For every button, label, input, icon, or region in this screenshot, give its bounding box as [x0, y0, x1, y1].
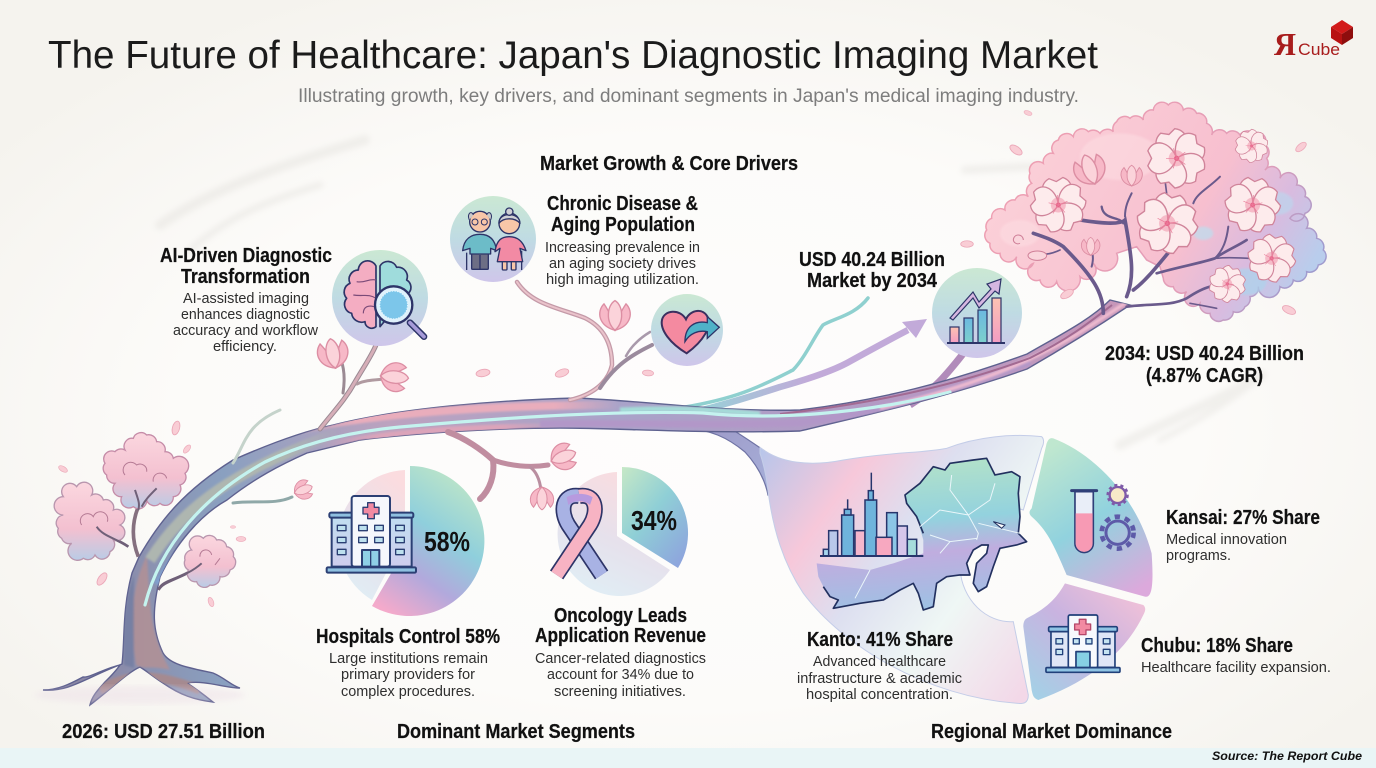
small tree branches and blossoms: [54, 433, 236, 590]
trunk shading: [133, 555, 170, 670]
icon: heart with arrow circle: [651, 294, 723, 366]
icon: growth chart circle: [932, 268, 1022, 358]
text block: oncology: Oncology Leads: [554, 604, 687, 627]
icon: city skyline: [820, 473, 923, 556]
segment: Chubu: [1023, 583, 1145, 700]
text block: Kansai: Kansai: 27% Share: [1166, 506, 1320, 529]
root shadow: [35, 686, 245, 704]
text block: chronic disease: high imaging utilization.: [546, 271, 699, 288]
caption: 2026: 2026: USD 27.51 Billion: [62, 720, 265, 743]
footer band: [0, 748, 1376, 768]
text block: AI-driven: AI-Driven Diagnostic: [160, 244, 332, 267]
icon: hospital: [327, 496, 416, 573]
text block: oncology: Application Revenue: [535, 624, 706, 647]
panel: regional donut: [760, 435, 1153, 703]
branch: lavender growth arrow: [670, 319, 927, 418]
title: The Future of Healthcare: Japan's Diagnostic Imaging Market: [48, 34, 1098, 77]
text block: Kanto: infrastructure & academic: [797, 670, 962, 687]
text block: Kanto: [797, 628, 962, 703]
icon: hospital: [1046, 615, 1120, 672]
text block: chronic disease: Chronic Disease &: [547, 192, 698, 215]
text block: oncology: screening initiatives.: [554, 683, 686, 700]
logo: RCube: Cube: [1298, 40, 1340, 59]
text block: chronic disease: an aging society drives: [549, 255, 696, 272]
text block: hospitals: Large institutions remain: [329, 650, 488, 667]
text block: AI-driven: enhances diagnostic: [181, 306, 310, 323]
text block: Kanto: Advanced healthcare: [813, 653, 946, 670]
text block: chronic disease: [545, 192, 700, 288]
caption: regional market dominance: Regional Market Dominance: [931, 720, 1172, 743]
heading: market growth: Market Growth & Core Drivers: [540, 152, 798, 175]
canopy branches: [1030, 177, 1250, 313]
value 34%: 34%: [631, 505, 677, 536]
decorative brush strokes: [160, 140, 1262, 445]
blossoms: [1013, 121, 1301, 310]
tree limb: trunk and main branch: [43, 300, 1130, 705]
blossom clump C: [184, 535, 236, 587]
icon: AI brain circle: [332, 250, 428, 346]
text block: Chubu: [1141, 634, 1331, 676]
text block: hospitals: primary providers for: [341, 666, 475, 683]
text block: Kanto: hospital concentration.: [806, 686, 953, 703]
text block: Chubu: Healthcare facility expansion.: [1141, 659, 1331, 676]
text block: oncology: account for 34% due to: [547, 666, 694, 683]
logo: RCube: Я: [1274, 26, 1296, 62]
text block: chronic disease: Increasing prevalence in: [545, 239, 700, 256]
branch to AI circle with buds: [315, 336, 410, 429]
text block: hospitals: [316, 625, 500, 700]
text block: Kanto: Kanto: 41% Share: [807, 628, 953, 651]
big cherry blossom canopy: [985, 102, 1326, 321]
text block: Chubu: Chubu: 18% Share: [1141, 634, 1293, 657]
limb bands: [100, 300, 1130, 690]
text block: Kansai: programs.: [1166, 547, 1231, 564]
text block: market by 2034: Market by 2034: [807, 269, 938, 292]
text block: hospitals: Hospitals Control 58%: [316, 625, 500, 648]
caption: dominant market segments: Dominant Market Segments: [397, 720, 635, 743]
text block: market by 2034: [799, 248, 945, 292]
branch to elder circle and heart circle: [517, 282, 652, 400]
text block: 2034 value: (4.87% CAGR): [1146, 364, 1263, 387]
subtitle: Illustrating growth, key drivers, and dominant segments in Japan's medical imaging industry.: [298, 86, 1079, 107]
text block: 2034 value: 2034: USD 40.24 Billion: [1105, 342, 1304, 365]
logo: RCube: [1274, 20, 1353, 62]
value 58%: 58%: [424, 526, 470, 557]
text block: Kansai: [1166, 506, 1320, 564]
branch: lower with buds: [448, 432, 580, 510]
branch flowing down into Kanto: [687, 428, 800, 495]
text block: Kansai: Medical innovation: [1166, 531, 1287, 548]
text block: AI-driven: [160, 244, 332, 355]
blossom clump B: [54, 482, 125, 560]
icon: elderly couple circle: [450, 196, 536, 282]
falling petals: [57, 110, 1308, 607]
branch: teal shoot: [620, 298, 868, 414]
source: Source: The Report Cube: [1212, 749, 1362, 763]
blossom clump A: [103, 433, 189, 509]
branch: small shoots on lower limb: [233, 410, 316, 503]
text block: AI-driven: efficiency.: [213, 338, 277, 355]
text block: market by 2034: USD 40.24 Billion: [799, 248, 945, 271]
text block: AI-driven: accuracy and workflow: [173, 322, 318, 339]
pie chart: hospitals 58%: [327, 466, 484, 616]
text block: AI-driven: Transformation: [181, 265, 310, 288]
icon: test tube and gears: [1072, 485, 1134, 552]
text block: AI-driven: AI-assisted imaging: [183, 290, 309, 307]
text block: 2034 value: [1105, 342, 1304, 387]
text block: oncology: Cancer-related diagnostics: [535, 650, 706, 667]
branch to chart circle: [910, 350, 966, 405]
text block: chronic disease: Aging Population: [551, 213, 695, 236]
text block: hospitals: complex procedures.: [341, 683, 475, 700]
segment: Kansai: [1029, 438, 1153, 597]
pie chart: oncology 34%: [557, 467, 688, 596]
text block: oncology: [535, 604, 706, 700]
segment: Kanto: [760, 435, 1044, 703]
icon: awareness ribbon: [557, 494, 602, 575]
icon: Kanto map: [817, 458, 1027, 610]
